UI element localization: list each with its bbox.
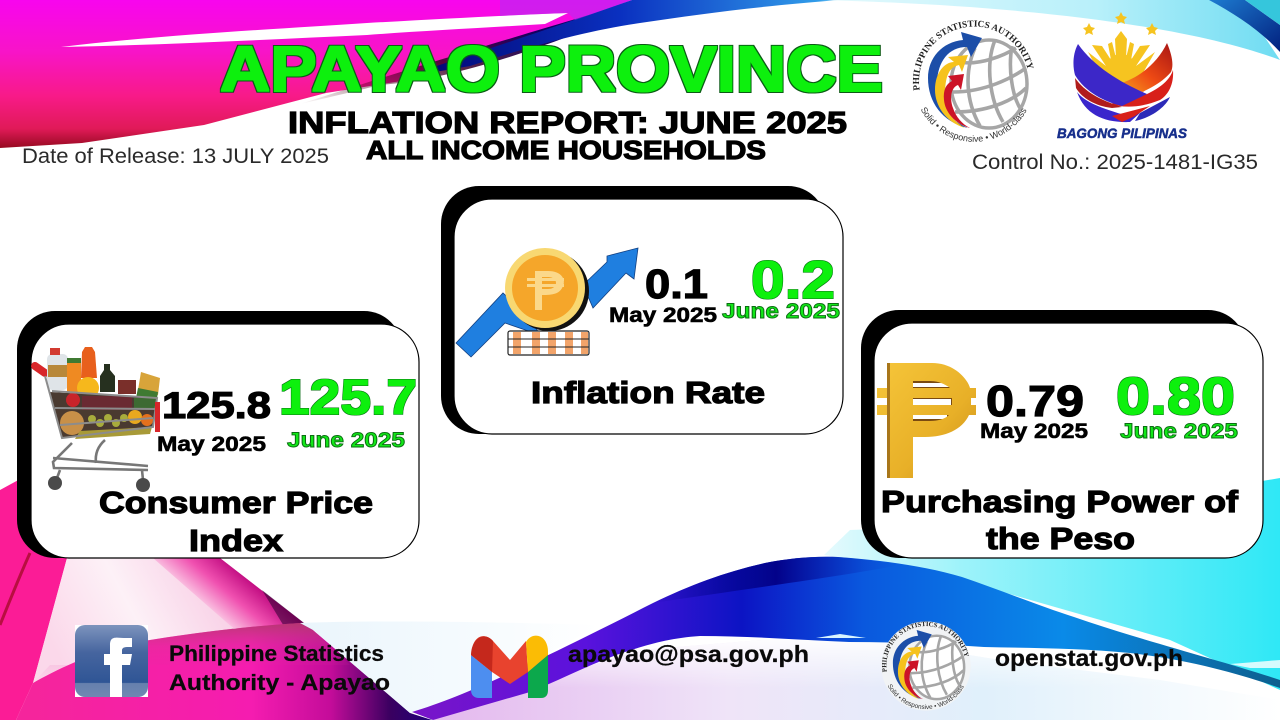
icon: Bagong Pilipinas logo: BAGONG PILIPINAS	[1057, 125, 1188, 141]
text: Facebook page name	[169, 641, 390, 695]
text: email address: apayao@psa.gov.ph	[568, 641, 809, 667]
text: June 2025 label: June 2025	[1120, 420, 1238, 443]
icon: grocery cart	[35, 347, 160, 492]
text: May 2025 label: May 2025	[980, 420, 1088, 443]
icon: PSA logo: Solid • Responsive • World-class	[921, 107, 1026, 142]
text: Facebook page name: Philippine Statistics	[169, 641, 384, 666]
text: date of release: Date of Release: 13 JULY 2025	[22, 145, 329, 168]
text: June 2025 inflation value: 0.2	[751, 251, 835, 310]
text: June 2025 label: June 2025	[287, 429, 405, 452]
heading: household coverage: ALL INCOME HOUSEHOLDS	[366, 135, 766, 165]
heading: province title: APAYAO PROVINCE	[220, 33, 883, 105]
text: May 2025 CPI value: 125.8	[162, 385, 271, 426]
icon: gold peso sign	[877, 363, 976, 478]
text: May 2025 peso value: 0.79	[986, 377, 1084, 426]
icon: Facebook	[75, 625, 148, 697]
icon: PSA logo small: PHILIPPINE STATISTICS AUTHORITY	[882, 622, 969, 672]
icon: PSA logo small: Solid • Responsive • World-class	[888, 684, 964, 710]
icon: PSA logo small	[882, 621, 970, 710]
text: June 2025 peso value: 0.80	[1116, 368, 1235, 426]
text: May 2025 label: May 2025	[609, 304, 717, 327]
heading: report subtitle: INFLATION REPORT: JUNE 2025	[288, 105, 847, 140]
panel: inflation rate	[441, 186, 843, 434]
panel: consumer price index	[17, 311, 419, 558]
text: Facebook page name: Authority - Apayao	[169, 670, 390, 695]
text: purchasing power title: Purchasing Power of	[881, 484, 1239, 519]
background: top decorative swooshes	[0, 0, 1280, 148]
text: control number: Control No.: 2025-1481-IG35	[972, 151, 1258, 174]
panel: purchasing power of the peso	[861, 310, 1263, 558]
icon: peso coin with rising arrow	[456, 248, 638, 357]
text: May 2025 inflation value: 0.1	[645, 261, 708, 307]
icon: PSA logo	[912, 20, 1034, 142]
text: website: openstat.gov.ph	[995, 645, 1183, 671]
text: June 2025 CPI value: 125.7	[279, 371, 417, 425]
background: bottom right blue swoosh	[300, 478, 1280, 720]
icon: PSA logo: PHILIPPINE STATISTICS AUTHORITY	[912, 20, 1034, 91]
icon: Bagong Pilipinas logo	[1057, 12, 1188, 141]
text: purchasing power title second line: the Peso	[986, 521, 1135, 556]
text: CPI title second line: Index	[189, 523, 284, 558]
text: CPI title: Consumer Price	[99, 485, 373, 520]
icon: Gmail	[471, 636, 548, 698]
background: bottom left pink swoosh	[0, 478, 432, 720]
text: May 2025 label: May 2025	[157, 433, 266, 456]
text: inflation rate title: Inflation Rate	[531, 375, 765, 410]
text: June 2025 label: June 2025	[722, 300, 840, 323]
